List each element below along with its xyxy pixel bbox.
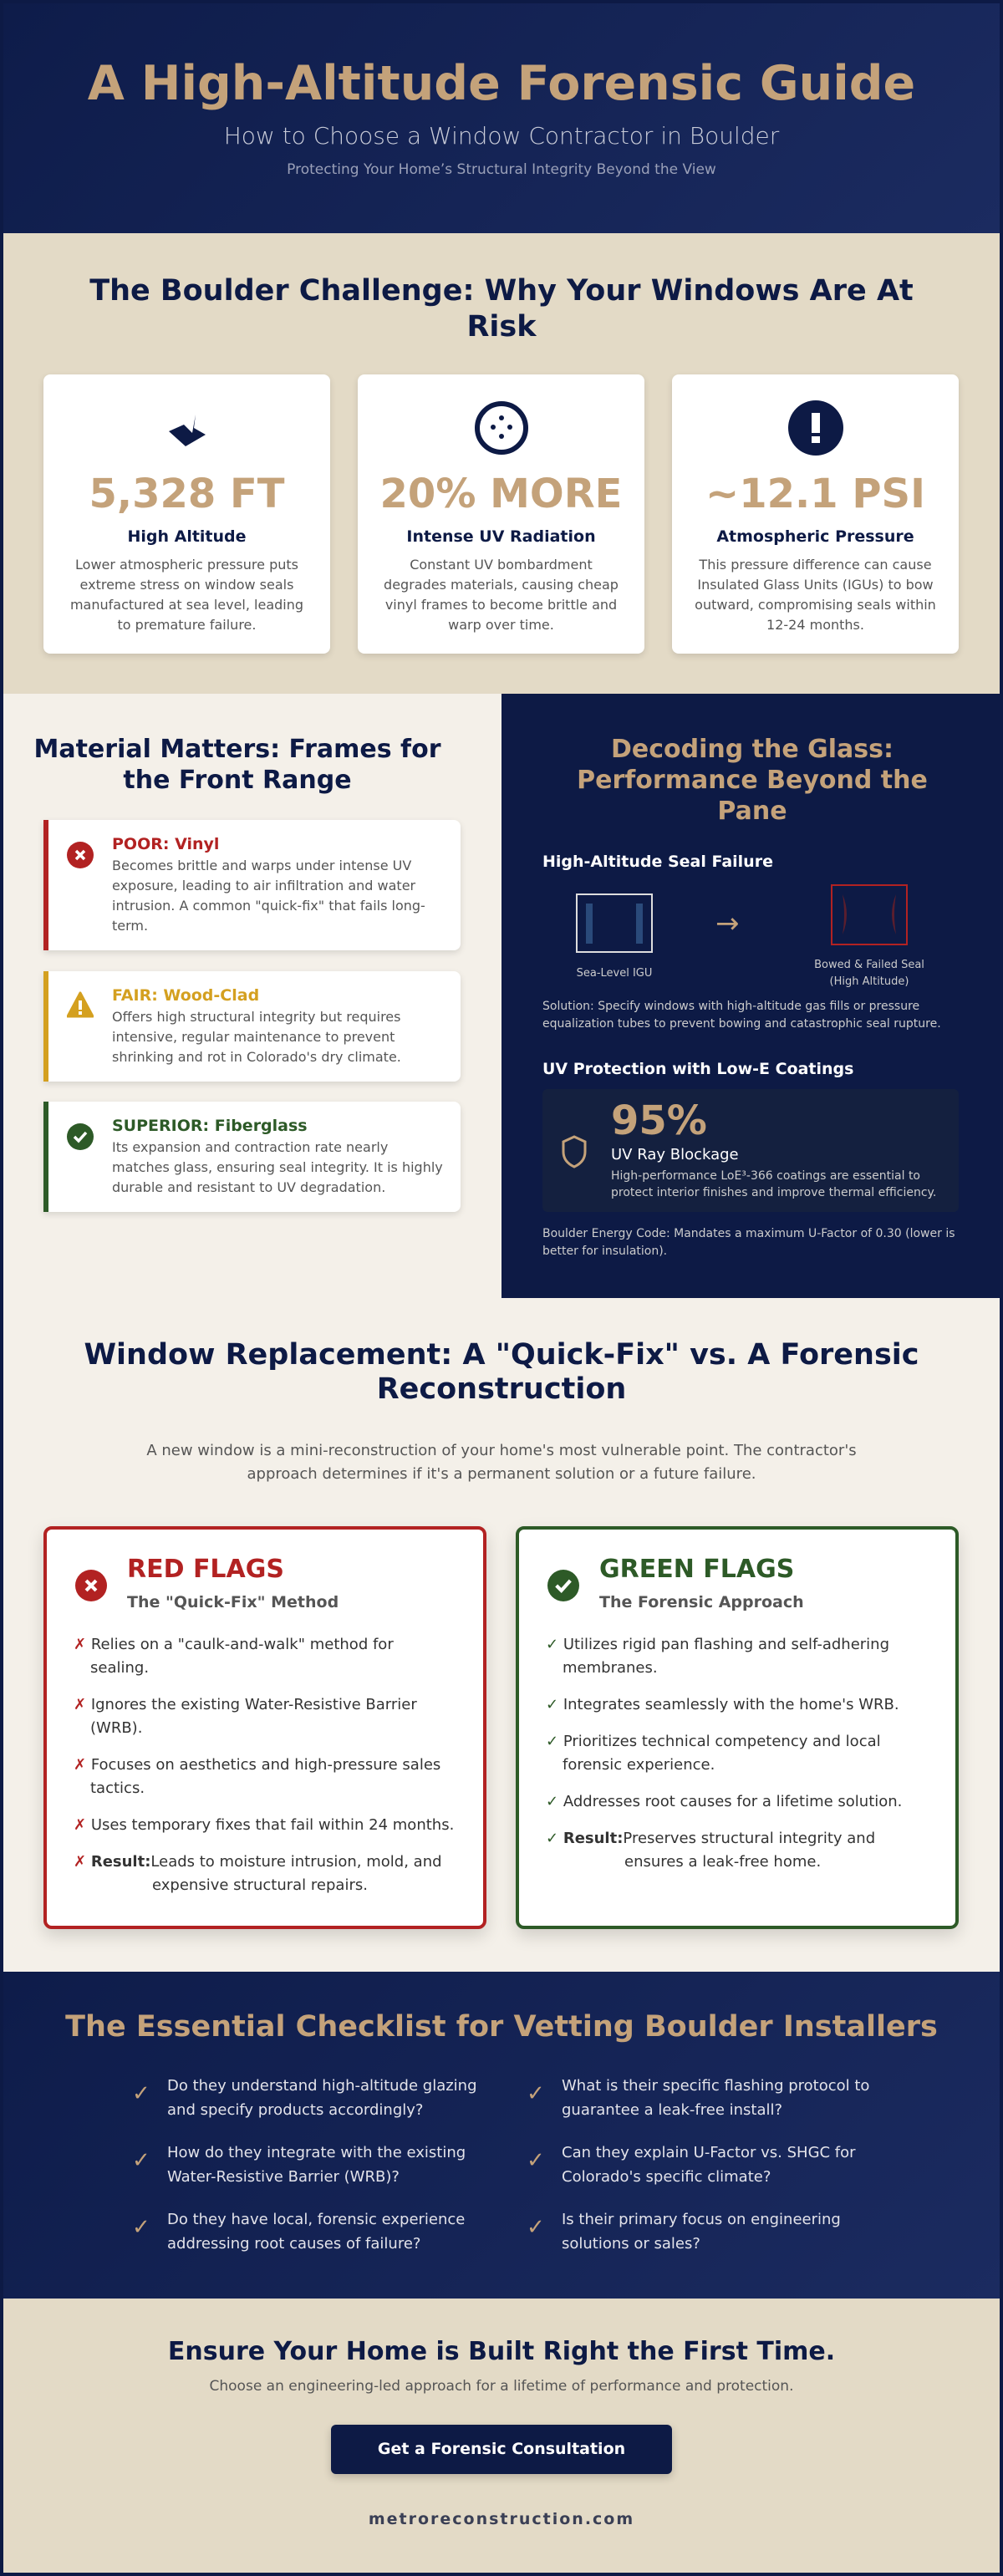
button: Get a Forensic Consultation <box>378 2440 625 2458</box>
heading: Decoding the Glass: Performance Beyond the Pane <box>577 735 928 826</box>
card: altitude: 5,328 FT <box>89 471 285 517</box>
card: red flags: ✗ Relies on a "caulk-and-walk" method for <box>74 1636 394 1653</box>
card: pressure <box>672 374 959 654</box>
card: uv: 20% MORE <box>380 471 622 517</box>
card: altitude: Lower atmospheric pressure puts extreme stress on window seals manufactured at sea level, leading to premature failure. <box>70 557 303 633</box>
stat box: 95% <box>542 1089 959 1212</box>
icon: exclamation <box>788 400 843 456</box>
card: uv <box>358 374 644 654</box>
section: checklist: ✓ <box>527 2215 545 2240</box>
section: boulder challenge <box>3 233 1000 694</box>
card: superior fiberglass <box>43 1102 461 1212</box>
section: checklist: ✓ <box>527 2148 545 2173</box>
card: altitude: High Altitude <box>127 527 247 546</box>
card: poor vinyl: POOR: Vinyl <box>112 835 219 853</box>
section: checklist <box>3 1972 1000 2299</box>
card: red flags: ✗ Focuses on aesthetics and high-pressure sales tactics. <box>74 1756 440 1797</box>
stat box: 95%: 95% <box>611 1097 707 1144</box>
section: checklist: How do they integrate with the existing Water-Resistive Barrier (WRB)? <box>167 2144 466 2186</box>
section: checklist: What is their specific flashing protocol to guarantee a leak-free install? <box>562 2077 869 2119</box>
card: green flags <box>516 1526 959 1929</box>
card: green flags: The Forensic Approach <box>599 1593 804 1611</box>
card: poor vinyl <box>43 820 461 950</box>
section: checklist: Can they explain U-Factor vs. SHGC for Colorado's specific climate? <box>562 2144 856 2186</box>
card: red flags <box>43 1526 486 1929</box>
card: pressure: ~12.1 PSI <box>705 471 925 517</box>
subtext: Choose an engineering-led approach for a lifetime of performance and protection. <box>210 2378 793 2395</box>
tagline: Protecting Your Home’s Structural Integrity Beyond the View <box>287 161 716 178</box>
card: green flags: ✓ Integrates seamlessly with the home's WRB. <box>546 1696 899 1713</box>
card: fair wood-clad: Offers high structural integrity but requires intensive, regular maintenance to prevent shrinking and rot in Colorado's dry climate. <box>112 1009 401 1065</box>
card: fair wood-clad: FAIR: Wood-Clad <box>112 986 259 1005</box>
heading: Window Replacement: A "Quick-Fix" vs. A Forensic Reconstruction <box>84 1338 919 1406</box>
heading: The Boulder Challenge: Why Your Windows Are At Risk <box>89 274 914 344</box>
intro text: A new window is a mini-reconstruction of your home's most vulnerable point. The contractor's approach determines if it's a permanent solution or a future failure. <box>146 1442 857 1483</box>
checklist items <box>132 2077 869 2253</box>
card: superior fiberglass: Its expansion and contraction rate nearly matches glass, ensuring seal integrity. It is highly durable and resistant to UV degradation. <box>112 1139 443 1195</box>
header <box>3 3 1000 233</box>
subheading: uv protection: UV Protection with Low-E Coatings <box>542 1060 853 1078</box>
section: checklist: Do they have local, forensic experience addressing root causes of failure? <box>167 2211 465 2253</box>
icon: mountain <box>169 415 206 446</box>
card: superior fiberglass: SUPERIOR: Fiberglass <box>112 1117 308 1135</box>
panel: decoding the glass <box>502 694 1000 1298</box>
diagram: igu comparison: Sea-Level IGU <box>577 967 652 980</box>
card: pressure: This pressure difference can cause Insulated Glass Units (IGUs) to bow outward, compromising seals within 12-24 months. <box>695 557 936 633</box>
section: checklist: ✓ <box>132 2215 150 2240</box>
subtitle: How to Choose a Window Contractor in Boulder <box>224 122 779 150</box>
solution text: Solution: Specify windows with high-altitude gas fills or pressure equalization tubes to prevent bowing and catastrophic seal rupture. <box>542 1000 941 1031</box>
card: uv: Constant UV bombardment degrades materials, causing cheap vinyl frames to become brittle and warp over time. <box>384 557 619 633</box>
card: green flags: GREEN FLAGS <box>599 1555 794 1584</box>
card: red flags: ✗ Ignores the existing Water-Resistive Barrier (WRB). <box>74 1696 417 1737</box>
section: checklist: ✓ <box>132 2148 150 2173</box>
stat box: 95%: UV Ray Blockage <box>611 1146 739 1163</box>
card: uv: Intense UV Radiation <box>406 527 596 546</box>
section: quick-fix vs forensic <box>3 1298 1000 1972</box>
heading: Ensure Your Home is Built Right the First Time. <box>168 2337 835 2366</box>
card: poor vinyl: Becomes brittle and warps under intense UV exposure, leading to air infiltration and water intrusion. A common "quick-fix" that fails long-term. <box>112 858 425 934</box>
section: checklist: ✓ <box>527 2081 545 2106</box>
section: checklist: ✓ <box>132 2081 150 2106</box>
diagram: igu comparison <box>576 884 924 988</box>
section: checklist: Is their primary focus on engineering solutions or sales? <box>562 2211 841 2253</box>
diagram: igu comparison: → <box>715 907 739 940</box>
button <box>331 2425 672 2474</box>
footer: call to action <box>3 2299 1000 2573</box>
panel: material matters <box>3 694 502 1298</box>
title: A High-Altitude Forensic Guide <box>88 56 915 111</box>
stat box: 95%: High-performance LoE³-366 coatings are essential to protect interior finishes and improve thermal efficiency. <box>611 1169 936 1199</box>
card: red flags: ✗ Uses temporary fixes that fail within 24 months. <box>74 1816 454 1834</box>
card: red flags: ✗ Result:Leads to moisture intrusion, mold, and expensive structural repairs. <box>74 1853 442 1894</box>
icon: sun dots <box>475 401 528 455</box>
card: green flags: ✓ Prioritizes technical competency and local forensic experience. <box>546 1733 881 1774</box>
diagram: igu comparison: Bowed & Failed Seal <box>814 959 924 971</box>
url: metroreconstruction.com <box>369 2510 634 2528</box>
card: red flags: RED FLAGS <box>127 1555 284 1584</box>
card: green flags: ✓ Result:Preserves structural integrity and ensures a leak-free home. <box>546 1830 875 1871</box>
card: green flags: ✓ Utilizes rigid pan flashing and self-adhering membranes. <box>546 1636 889 1677</box>
card: green flags: ✓ Addresses root causes for a lifetime solution. <box>546 1793 902 1810</box>
card: fair wood-clad <box>43 971 461 1082</box>
energy code note: Boulder Energy Code: Mandates a maximum U-Factor of 0.30 (lower is better for insulation). <box>542 1227 955 1258</box>
card: red flags: sealing. <box>90 1659 149 1677</box>
diagram: igu comparison: (High Altitude) <box>830 975 909 988</box>
card: pressure: Atmospheric Pressure <box>716 527 914 546</box>
heading: The Essential Checklist for Vetting Boulder Installers <box>65 2010 938 2044</box>
subheading: seal failure: High-Altitude Seal Failure <box>542 853 773 871</box>
card: altitude <box>43 374 330 654</box>
card: red flags: The "Quick-Fix" Method <box>127 1593 339 1611</box>
section: checklist: Do they understand high-altitude glazing and specify products accordingly? <box>167 2077 477 2119</box>
heading: Material Matters: Frames for the Front Range <box>33 735 441 795</box>
